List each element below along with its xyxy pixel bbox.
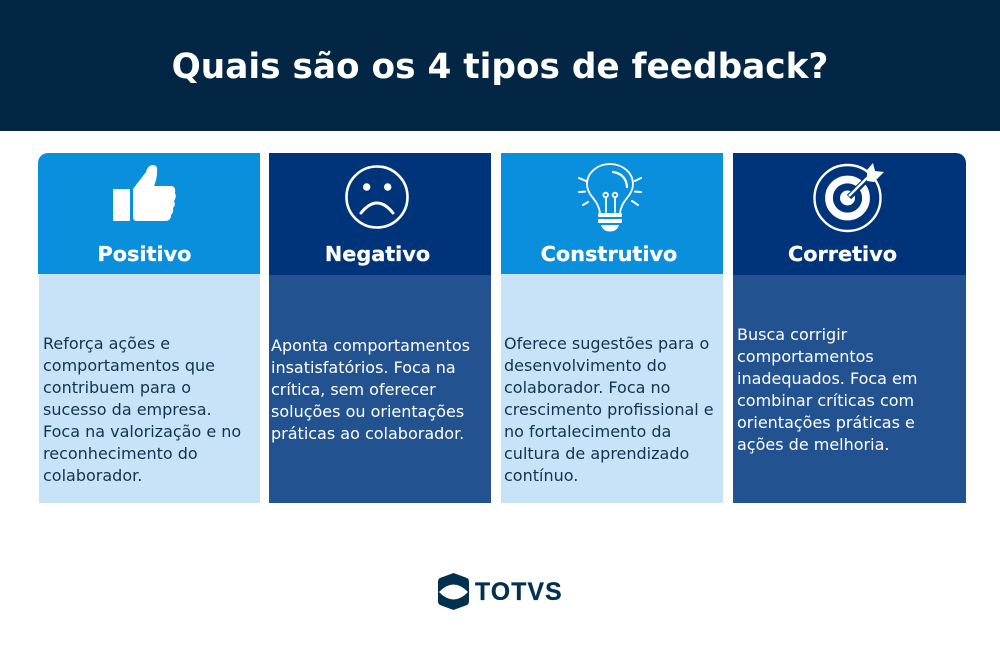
text: Construtivo description <box>504 334 714 485</box>
icon: thumbs up <box>113 165 176 221</box>
icon: TOTVS hexagon mark <box>438 573 469 610</box>
icon: sad face <box>345 165 409 229</box>
heading: Construtivo: Construtivo <box>541 242 677 266</box>
text: Corretivo description: Busca corrigir <box>737 325 847 344</box>
header band <box>0 0 1000 131</box>
text: Positivo description: comportamentos que <box>43 356 215 375</box>
icon: target with arrow <box>813 163 884 232</box>
panel header: Construtivo <box>501 153 723 274</box>
logo: TOTVS <box>438 573 563 610</box>
text: Construtivo description: colaborador. Foca no <box>504 378 670 397</box>
panel header: Negativo <box>269 153 491 275</box>
text: Positivo description: sucesso da empresa. <box>43 400 212 419</box>
panel: Negativo <box>269 153 491 503</box>
panel header: Positivo <box>38 153 260 274</box>
heading: Positivo: Positivo <box>98 242 191 266</box>
text: Positivo description <box>43 334 241 485</box>
icon: light bulb <box>578 163 642 232</box>
text: Corretivo description: combinar críticas com <box>737 391 914 410</box>
title: Quais são os 4 tipos de feedback? <box>172 47 828 87</box>
heading: Corretivo: Corretivo <box>788 242 897 266</box>
text: Positivo description: Foca na valorização e no <box>43 422 241 441</box>
text: Construtivo description: crescimento profissional e <box>504 400 714 419</box>
text: Positivo description: contribuem para o <box>43 378 191 397</box>
text: Negativo description: insatisfatórios. Foca na <box>271 358 456 377</box>
panel body: Construtivo <box>501 274 723 503</box>
text: Corretivo description <box>737 325 917 454</box>
text: Corretivo description: comportamentos <box>737 347 874 366</box>
text: Negativo description: práticas ao colaborador. <box>271 424 464 443</box>
panel: Corretivo <box>733 153 966 503</box>
panel: Positivo <box>38 153 260 503</box>
text: Corretivo description: inadequados. Foca em <box>737 369 917 388</box>
panel body: Negativo <box>269 275 491 503</box>
text: Positivo description: colaborador. <box>43 466 142 485</box>
text: Construtivo description: contínuo. <box>504 466 578 485</box>
text: Construtivo description: cultura de aprendizado <box>504 444 689 463</box>
text: Construtivo description: Oferece sugestões para o <box>504 334 709 353</box>
panel header: Corretivo <box>733 153 966 275</box>
text: Negativo description: crítica, sem oferecer <box>271 380 436 399</box>
text: Positivo description: Reforça ações e <box>43 334 170 353</box>
text: Negativo description: Aponta comportamentos <box>271 336 470 355</box>
text: Corretivo description: orientações práticas e <box>737 413 915 432</box>
text: Negativo description: soluções ou orientações <box>271 402 464 421</box>
text: Positivo description: reconhecimento do <box>43 444 198 463</box>
panel body: Positivo <box>39 274 260 503</box>
wordmark: TOTVS: TOTVS <box>475 579 563 606</box>
text: Corretivo description: ações de melhoria. <box>737 435 889 454</box>
text: Negativo description <box>271 336 470 443</box>
panel body: Corretivo <box>733 275 966 503</box>
panel: Construtivo <box>501 153 723 503</box>
text: Construtivo description: no fortalecimento da <box>504 422 671 441</box>
text: Construtivo description: desenvolvimento do <box>504 356 667 375</box>
heading: Negativo: Negativo <box>325 242 430 266</box>
